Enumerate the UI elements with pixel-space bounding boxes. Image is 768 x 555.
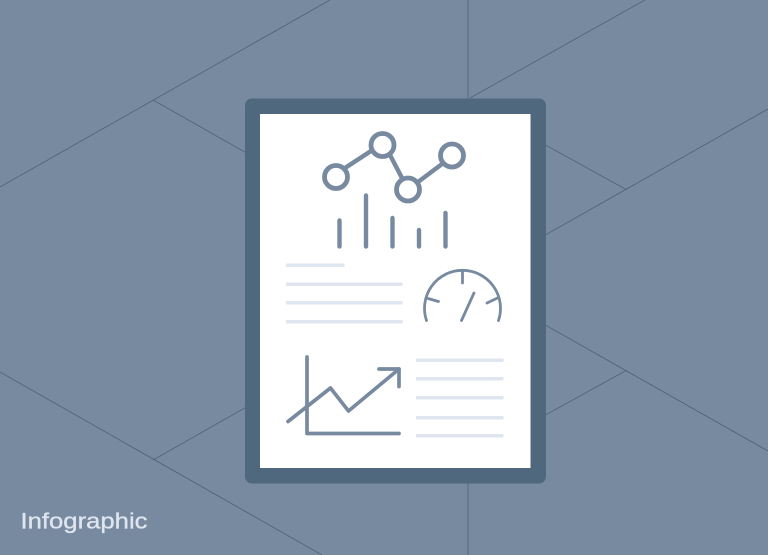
line chart with circular nodes [324,134,464,201]
bar chart [340,196,446,246]
growth chart icon [288,357,399,434]
document page [260,114,530,468]
gauge icon [424,270,500,320]
document frame [245,98,546,484]
brand label: Infographic [20,508,148,534]
text lines: right block [416,358,504,438]
text lines: left block [286,264,402,324]
